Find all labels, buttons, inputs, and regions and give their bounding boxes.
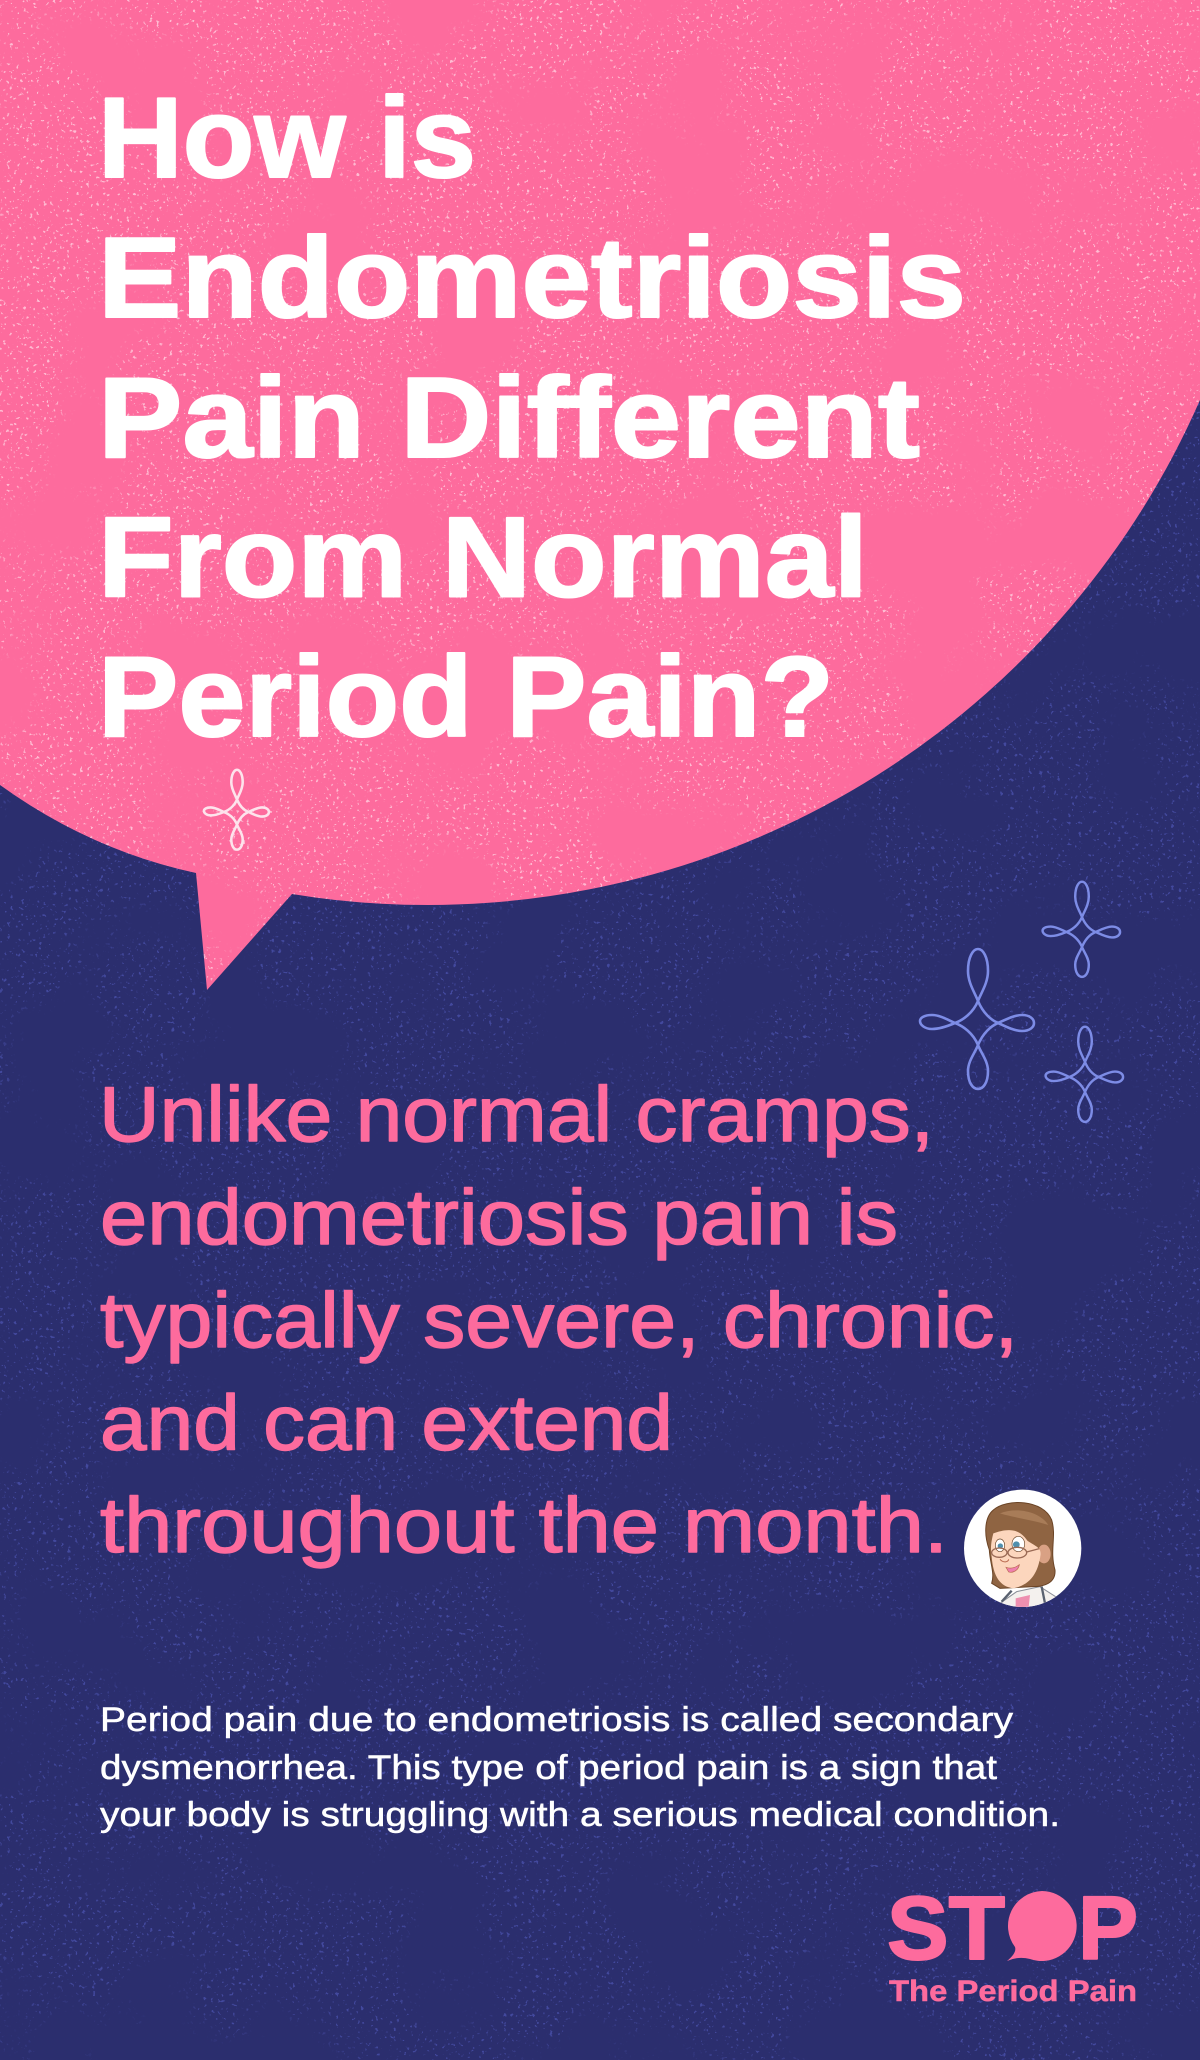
supporting paragraph xyxy=(100,1701,1060,1834)
icon: small blue sparkle top right xyxy=(1043,882,1120,977)
title xyxy=(98,75,966,761)
title: Period Pain? xyxy=(98,634,834,761)
title: How is xyxy=(98,75,476,202)
key statement: pink text: typically severe, chronic, xyxy=(100,1276,1018,1364)
icon: doctor avatar xyxy=(964,1490,1081,1613)
title: Pain Different xyxy=(98,355,920,482)
icon: sparkle on bubble xyxy=(204,770,269,850)
icon: speech bubble letter O xyxy=(1007,1891,1077,1961)
logo: STOP The Period Pain: P xyxy=(1078,1879,1138,1979)
icon: small blue sparkle bottom right xyxy=(1046,1027,1123,1122)
key statement: pink text: throughout the month. xyxy=(100,1481,948,1569)
key statement: pink text: Unlike normal cramps, xyxy=(99,1070,934,1158)
title: From Normal xyxy=(98,494,868,622)
logo: STOP The Period Pain xyxy=(887,1879,1138,2008)
supporting paragraph: Period pain due to endometriosis is called secondary xyxy=(100,1701,1013,1739)
supporting paragraph: dysmenorrhea. This type of period pain is a sign that xyxy=(100,1749,998,1787)
speech bubble: pink header panel with tail xyxy=(0,0,1200,1000)
key statement: pink text xyxy=(99,1070,1018,1569)
key statement: pink text: and can extend xyxy=(100,1378,673,1466)
icon: large blue sparkle xyxy=(920,949,1034,1089)
title: Endometriosis xyxy=(98,215,966,342)
supporting paragraph: your body is struggling with a serious medical condition. xyxy=(100,1796,1060,1834)
key statement: pink text: endometriosis pain is xyxy=(100,1173,898,1261)
logo: STOP The Period Pain: The Period Pain xyxy=(889,1975,1137,2008)
logo: STOP The Period Pain: ST xyxy=(887,1879,1005,1979)
